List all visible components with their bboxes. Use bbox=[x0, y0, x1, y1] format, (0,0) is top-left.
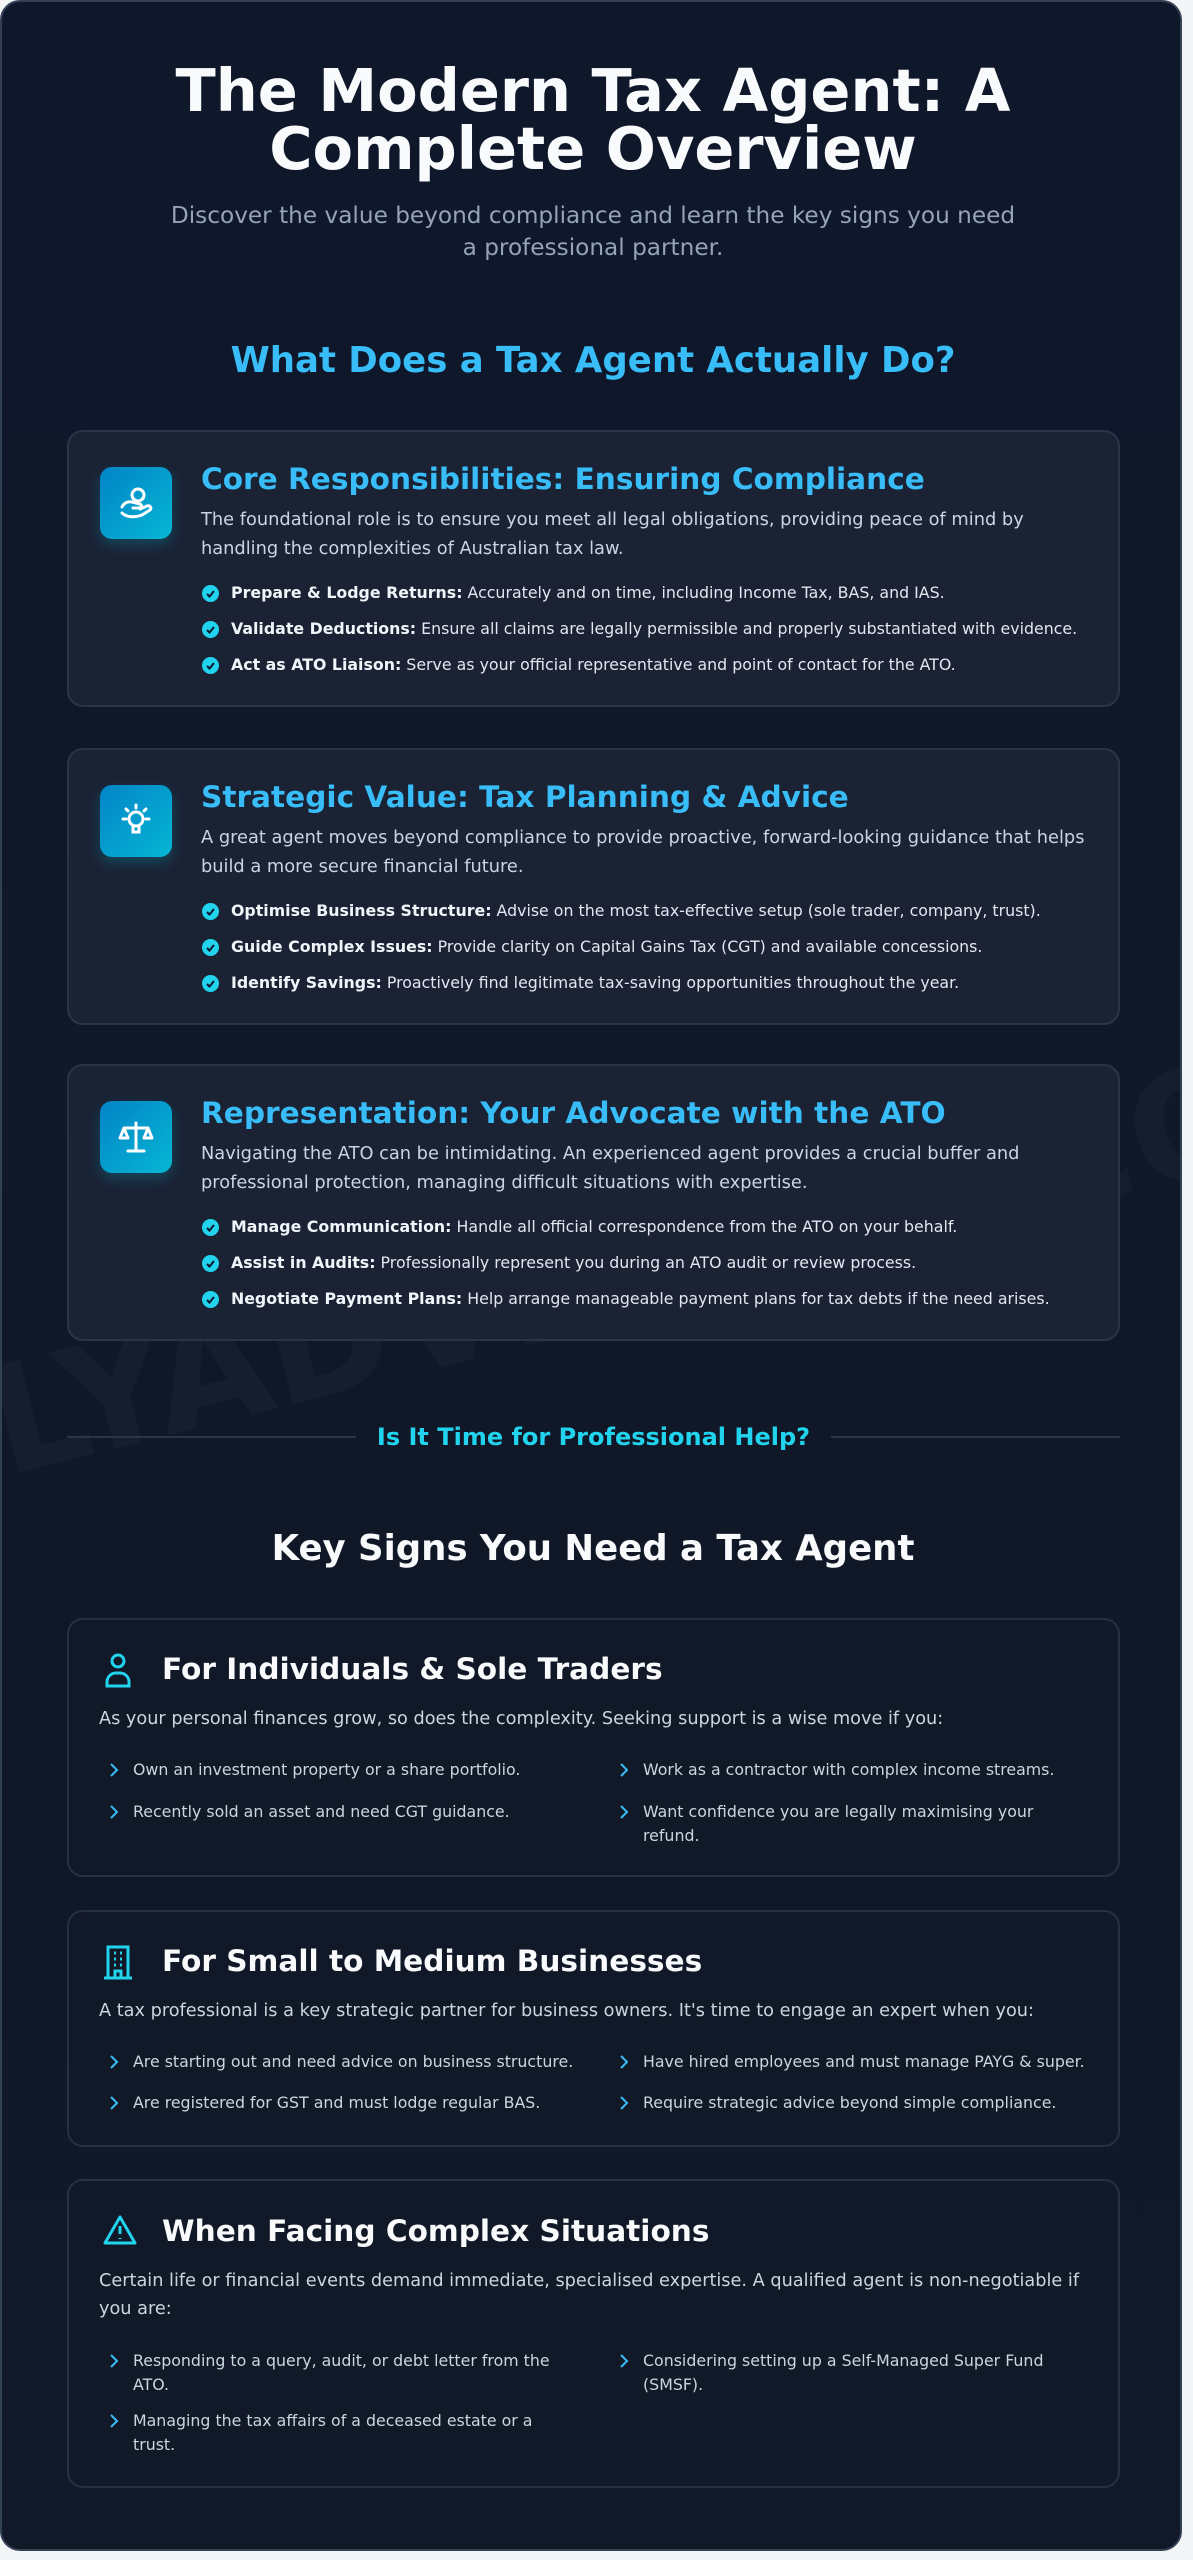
card heading: Strategic Value: Tax Planning & Advice bbox=[201, 780, 849, 814]
icon: building bbox=[104, 1946, 132, 1980]
card description: The foundational role is to ensure you meet all legal obligations, providing peace of mind by handling the complexities of Australian tax law. bbox=[201, 509, 1024, 559]
bullet list bbox=[202, 583, 1077, 674]
bullet list: Negotiate Payment Plans: Help arrange manageable payment plans for tax debts if the need arises. bbox=[231, 1289, 1050, 1308]
icon: warning bbox=[103, 2215, 136, 2244]
bullet list: Guide Complex Issues: Provide clarity on Capital Gains Tax (CGT) and available concessions. bbox=[231, 937, 982, 956]
card description: A great agent moves beyond compliance to provide proactive, forward-looking guidance that helps build a more secure financial future. bbox=[201, 827, 1084, 877]
card heading: Core Responsibilities: Ensuring Compliance bbox=[201, 462, 925, 496]
divider label: Is It Time for Professional Help? bbox=[377, 1423, 810, 1451]
heading: what does a tax agent do: What Does a Tax Agent Actually Do? bbox=[231, 340, 955, 381]
card heading: Representation: Your Advocate with the ATO bbox=[201, 1096, 946, 1130]
bullet list: Act as ATO Liaison: Serve as your official representative and point of contact for the ATO. bbox=[231, 655, 956, 674]
bullet list: Prepare & Lodge Returns: Accurately and on time, including Income Tax, BAS, and IAS. bbox=[231, 583, 945, 602]
list: Want confidence you are legally maximising your refund. bbox=[643, 1802, 1033, 1845]
panel: core responsibilities bbox=[67, 430, 1120, 707]
list: Require strategic advice beyond simple compliance. bbox=[643, 2093, 1056, 2112]
list bbox=[110, 2351, 1043, 2454]
list: Are registered for GST and must lodge regular BAS. bbox=[133, 2093, 540, 2112]
panel: complex situations bbox=[67, 2179, 1120, 2488]
title: The Modern Tax Agent: A bbox=[176, 56, 1010, 125]
bullet list bbox=[202, 1217, 1050, 1308]
bullet list: Manage Communication: Handle all official correspondence from the ATO on your behalf. bbox=[231, 1217, 957, 1236]
subtitle: a professional partner. bbox=[463, 234, 723, 261]
heading: For Individuals & Sole Traders bbox=[162, 1652, 663, 1686]
bullet list: Assist in Audits: Professionally represent you during an ATO audit or review process. bbox=[231, 1253, 916, 1272]
description: A tax professional is a key strategic partner for business owners. It's time to engage an expert when you: bbox=[99, 2001, 1034, 2021]
list: Work as a contractor with complex income streams. bbox=[643, 1760, 1054, 1779]
bullet list: Validate Deductions: Ensure all claims are legally permissible and properly substantiated with evidence. bbox=[231, 619, 1077, 638]
heading: When Facing Complex Situations bbox=[162, 2214, 709, 2248]
list bbox=[110, 2052, 1085, 2112]
title: Complete Overview bbox=[269, 114, 917, 183]
icon: lightbulb bbox=[100, 785, 172, 857]
icon: scales bbox=[100, 1101, 172, 1173]
list: Are starting out and need advice on business structure. bbox=[133, 2052, 573, 2071]
heading: key signs: Key Signs You Need a Tax Agent bbox=[272, 1528, 914, 1569]
panel: businesses bbox=[67, 1910, 1120, 2147]
list: Considering setting up a Self-Managed Super Fund (SMSF). bbox=[643, 2351, 1043, 2394]
heading: For Small to Medium Businesses bbox=[162, 1944, 702, 1978]
title bbox=[176, 56, 1010, 183]
list: Have hired employees and must manage PAYG & super. bbox=[643, 2052, 1085, 2071]
panel: representation bbox=[67, 1064, 1120, 1341]
icon: person bbox=[106, 1654, 130, 1688]
panel: strategic value bbox=[67, 748, 1120, 1025]
list: Recently sold an asset and need CGT guidance. bbox=[133, 1802, 510, 1821]
description: Certain life or financial events demand immediate, specialised expertise. A qualified agent is non-negotiable if you are: bbox=[99, 2271, 1079, 2319]
subtitle bbox=[171, 202, 1015, 261]
card description: Navigating the ATO can be intimidating. An experienced agent provides a crucial buffer and professional protection, managing difficult situations with expertise. bbox=[201, 1143, 1019, 1193]
list: Managing the tax affairs of a deceased estate or a trust. bbox=[133, 2411, 532, 2454]
icon: hand with coin bbox=[100, 467, 172, 539]
bullet list: Optimise Business Structure: Advise on the most tax-effective setup (sole trader, company, trust). bbox=[231, 901, 1041, 920]
description: As your personal finances grow, so does the complexity. Seeking support is a wise move if you: bbox=[99, 1709, 943, 1729]
bullet list: Identify Savings: Proactively find legitimate tax-saving opportunities throughout the year. bbox=[231, 973, 959, 992]
bullet list bbox=[202, 901, 1041, 992]
list: Responding to a query, audit, or debt letter from the ATO. bbox=[133, 2351, 550, 2394]
subtitle: Discover the value beyond compliance and learn the key signs you need bbox=[171, 202, 1015, 229]
panel: individuals bbox=[67, 1618, 1120, 1877]
list bbox=[110, 1760, 1054, 1845]
list: Own an investment property or a share portfolio. bbox=[133, 1760, 520, 1779]
